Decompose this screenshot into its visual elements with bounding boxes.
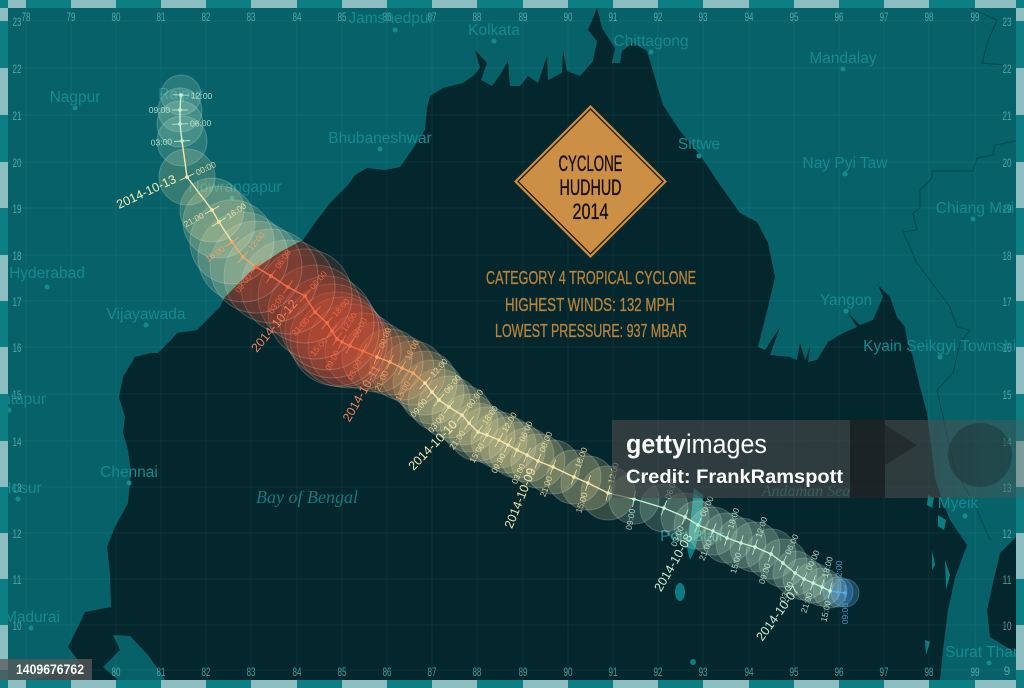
date labels along track: 2014-10-10 — [406, 417, 460, 473]
longitude and latitude labels: 97 — [880, 10, 889, 24]
city labels: Raipur — [158, 86, 204, 103]
longitude and latitude labels: 98 — [924, 665, 934, 679]
three-hourly ticks and time labels: 12:00 — [339, 310, 359, 334]
three-hourly ticks and time labels: 18:00 — [573, 446, 589, 469]
sea name: Andaman Sea: Andaman Sea — [761, 483, 850, 500]
city labels: Yangon — [820, 292, 872, 309]
three-hourly ticks and time labels: 03:00 — [266, 292, 287, 315]
longitude and latitude labels: 13 — [12, 481, 22, 495]
longitude and latitude labels: 79 — [66, 665, 76, 679]
cyclone statistics text — [486, 267, 696, 341]
city labels: Bhubaneshwar — [328, 130, 432, 147]
image id tag — [0, 659, 92, 680]
longitude and latitude labels: 17 — [12, 295, 22, 309]
three-hourly ticks and time labels: 21:00 — [538, 474, 554, 498]
three-hourly ticks and time labels: 21:00 — [799, 591, 815, 614]
watermark credit: Credit: FrankRamspott — [626, 467, 844, 488]
three-hourly ticks and time labels: 09:00 — [624, 508, 637, 531]
longitude and latitude labels: 93 — [698, 665, 708, 679]
longitude and latitude labels: 18 — [1002, 249, 1012, 263]
three-hourly ticks and time labels: 03:00 — [345, 358, 363, 381]
longitude and latitude labels: 13 — [1002, 481, 1012, 495]
image id tag: 1409676762 — [16, 662, 84, 677]
cyclone statistics text: LOWEST PRESSURE: 937 MBAR — [495, 320, 687, 341]
city labels: Port Blair — [660, 528, 724, 545]
three-hourly ticks and time labels: 09:00 — [840, 603, 850, 624]
longitude and latitude labels: 97 — [880, 665, 889, 679]
three-hourly ticks and time labels: 09:00 — [233, 272, 254, 295]
longitude and latitude labels: 85 — [338, 665, 347, 679]
three-hourly ticks and time labels: 03:00 — [509, 462, 527, 485]
longitude and latitude labels: 94 — [744, 10, 754, 24]
longitude and latitude labels: 83 — [246, 10, 256, 24]
date labels along track: 2014-10-08 — [651, 531, 696, 594]
longitude and latitude labels: 82 — [202, 665, 211, 679]
longitude and latitude labels: 88 — [472, 665, 482, 679]
longitude and latitude labels: 96 — [834, 665, 844, 679]
longitude and latitude labels: 85 — [338, 10, 347, 24]
title text: 2014 — [572, 199, 608, 224]
longitude and latitude labels: 23 — [1002, 15, 1012, 29]
three-hourly ticks and time labels: 03:00 — [426, 412, 447, 435]
three-hourly ticks and time labels: 18:00 — [820, 555, 835, 579]
longitude and latitude labels: 79 — [66, 10, 76, 24]
three-hourly ticks and time labels: 06:00 — [517, 419, 535, 443]
three-hourly ticks and time labels: 09:00 — [149, 105, 170, 115]
storm wind-radius circles along track — [157, 75, 859, 608]
three-hourly ticks and time labels: 00:00 — [308, 269, 329, 292]
three-hourly ticks and time labels: 09:00 — [757, 562, 773, 585]
longitude and latitude labels: 91 — [608, 10, 618, 24]
longitude and latitude labels: 19 — [1002, 202, 1012, 216]
sea name: Bay of Bengal: Bay of Bengal — [256, 487, 358, 507]
sea: Gulf of Thailand — [987, 537, 1016, 653]
longitude and latitude labels: 10 — [12, 619, 22, 633]
three-hourly ticks and time labels: 15:00 — [204, 243, 227, 264]
date labels along track: 2014-10-12 — [248, 297, 300, 355]
city labels: Vijayawada — [106, 306, 186, 323]
three-hourly ticks and time labels: 00:00 — [376, 326, 393, 350]
longitude and latitude labels: 89 — [518, 10, 528, 24]
city labels: Hyderabad — [9, 265, 85, 282]
three-hourly ticks and time labels: 12:00 — [246, 230, 267, 253]
watermark logo: gettyimages — [626, 429, 767, 459]
longitude and latitude labels: 86 — [382, 665, 392, 679]
three-hourly ticks and time labels: 06:00 — [783, 532, 801, 556]
date labels along track: 2014-10-13 — [114, 172, 178, 212]
three-hourly ticks and time labels: 18:00 — [402, 338, 421, 362]
three-hourly ticks and time labels: 00:00 — [194, 159, 218, 177]
longitude and latitude labels: 84 — [292, 665, 302, 679]
city labels: Kyain Seikgyi Township — [863, 338, 1024, 355]
three-hourly ticks and time labels: 15:00 — [819, 599, 833, 623]
longitude and latitude labels: 82 — [202, 10, 211, 24]
longitude and latitude labels: 10 — [1002, 619, 1012, 633]
longitude and latitude labels: 88 — [472, 10, 482, 24]
city labels: Hosur — [0, 480, 42, 497]
longitude and latitude labels: 21 — [12, 109, 22, 123]
three-hourly ticks and time labels: 00:00 — [464, 387, 485, 410]
three-hourly ticks and time labels: 12:00 — [753, 515, 770, 539]
longitude and latitude labels: 14 — [12, 435, 22, 449]
longitude and latitude labels: 81 — [156, 10, 166, 24]
three-hourly ticks and time labels: 15:00 — [574, 491, 590, 514]
longitude and latitude labels: 78 — [22, 10, 31, 24]
longitude and latitude labels: 91 — [608, 665, 618, 679]
city labels: Nowrangapur — [188, 179, 282, 196]
longitude and latitude labels: 16 — [1002, 341, 1012, 355]
longitude and latitude labels: 92 — [654, 10, 663, 24]
three-hourly ticks and time labels: 09:00 — [323, 348, 342, 372]
date labels along track: 2014-10-09 — [502, 466, 539, 530]
three-hourly ticks and time labels: 12:00 — [833, 560, 844, 582]
longitude and latitude labels: 83 — [246, 665, 256, 679]
longitude and latitude labels: 12 — [1002, 527, 1012, 541]
cyclone statistics text: HIGHEST WINDS: 132 MPH — [505, 294, 675, 315]
longitude and latitude labels: 80 — [112, 10, 121, 24]
city labels: Myeik — [938, 495, 978, 512]
city labels: Chiang Mai — [936, 200, 1014, 217]
longitude and latitude labels: 92 — [654, 665, 663, 679]
three-hourly ticks and time labels: 06:00 — [442, 373, 463, 396]
longitude and latitude labels: 94 — [744, 665, 754, 679]
three-hourly ticks and time labels: 18:00 — [725, 506, 742, 530]
longitude and latitude labels: 86 — [382, 10, 392, 24]
three-hourly ticks and time labels: 12:00 — [191, 90, 213, 101]
city labels: Chittagong — [614, 33, 688, 50]
three-hourly ticks and time labels: 09:00 — [489, 451, 508, 475]
longitude and latitude labels: 95 — [790, 10, 799, 24]
land border lines — [903, 8, 1016, 540]
longitude and latitude labels: 17 — [1002, 295, 1012, 309]
three-hourly ticks and time labels: 09:00 — [408, 396, 430, 419]
longitude and latitude labels: 19 — [12, 202, 22, 216]
longitude and latitude labels: 87 — [428, 10, 437, 24]
three-hourly ticks and time labels: 03:00 — [150, 137, 173, 148]
three-hourly ticks and time labels: 21:00 — [697, 538, 714, 562]
longitude and latitude labels: 84 — [292, 10, 302, 24]
longitude and latitude labels: 90 — [564, 665, 573, 679]
three-hourly ticks and time labels: 03:00 — [669, 524, 686, 548]
longitude and latitude labels: 11 — [1002, 573, 1012, 587]
road sign: cyclone title — [514, 105, 667, 258]
date labels along track: 2014-10-11 — [340, 362, 384, 424]
three-hourly ticks and time labels: 06:00 — [663, 477, 679, 500]
land: Andaman and Nicobar islands — [675, 488, 950, 665]
three-hourly ticks and time labels: 21:00 — [372, 369, 390, 392]
date labels along track — [114, 172, 802, 644]
longitude and latitude labels: 12 — [12, 527, 22, 541]
three-hourly ticks and time labels: 00:00 — [698, 494, 716, 518]
three-hourly ticks and time labels: 12:00 — [428, 356, 450, 379]
three-hourly ticks and time labels: 18:00 — [480, 403, 500, 427]
storm track line — [180, 95, 845, 593]
three-hourly ticks and time labels — [149, 90, 850, 624]
three-hourly ticks and time labels: 03:00 — [777, 580, 795, 603]
longitude and latitude labels: 9 — [1004, 664, 1011, 678]
three-hourly ticks and time labels: 15:00 — [728, 551, 743, 575]
city labels: Jamshedpur — [348, 10, 434, 27]
three-hourly ticks and time labels: 21:00 — [182, 210, 206, 229]
city labels: Surat Thani — [945, 644, 1024, 661]
longitude and latitude labels: 89 — [518, 665, 528, 679]
longitude and latitude labels: 18 — [12, 249, 22, 263]
longitude and latitude labels: 87 — [428, 665, 437, 679]
longitude and latitude labels: 15 — [1002, 388, 1012, 402]
city labels: Sittwe — [678, 136, 720, 153]
longitude and latitude labels: 81 — [156, 665, 166, 679]
longitude and latitude labels: 22 — [1002, 62, 1012, 76]
longitude and latitude labels: 16 — [12, 341, 22, 355]
longitude and latitude labels: 80 — [112, 665, 121, 679]
longitude and latitude labels: 96 — [834, 10, 844, 24]
longitude and latitude labels: 95 — [790, 665, 799, 679]
city labels: Mandalay — [809, 50, 877, 67]
city labels: Madurai — [4, 609, 60, 626]
date labels along track: 2014-10-07 — [754, 584, 802, 644]
longitude and latitude labels: 20 — [12, 156, 22, 170]
watermark panel — [612, 420, 1024, 498]
longitude and latitude labels: 90 — [564, 10, 573, 24]
three-hourly ticks and time labels: 18:00 — [225, 201, 248, 221]
cyclone statistics text: CATEGORY 4 TROPICAL CYCLONE — [486, 267, 696, 288]
city labels: Chennai — [100, 464, 158, 481]
land: Sri Lanka — [103, 635, 165, 680]
title text: CYCLONE — [558, 151, 622, 176]
three-hourly ticks and time labels: 15:00 — [393, 379, 412, 403]
longitude and latitude labels: 22 — [12, 62, 22, 76]
three-hourly ticks and time labels: 12:00 — [606, 461, 621, 485]
city labels: Nay Pyi Taw — [802, 155, 888, 172]
longitude and latitude labels: 93 — [698, 10, 708, 24]
three-hourly ticks and time labels: 06:00 — [190, 118, 212, 129]
three-hourly ticks and time labels: 21:00 — [289, 315, 312, 338]
three-hourly ticks and time labels: 15:00 — [308, 335, 330, 358]
city labels: Nagpur — [50, 89, 100, 106]
title text — [558, 151, 622, 224]
three-hourly ticks and time labels: 18:00 — [330, 296, 352, 319]
three-hourly ticks and time labels: 00:00 — [537, 430, 554, 454]
title text: HUDHUD — [560, 175, 622, 200]
three-hourly ticks and time labels: 21:00 — [447, 428, 468, 451]
longitude and latitude labels: 98 — [924, 10, 934, 24]
city labels: Kolkata — [468, 22, 520, 39]
three-hourly ticks and time labels: 06:00 — [273, 247, 293, 271]
three-hourly ticks and time labels: 06:00 — [350, 316, 369, 340]
longitude and latitude labels: 21 — [1002, 109, 1012, 123]
longitude and latitude labels: 11 — [12, 573, 22, 587]
longitude and latitude labels: 99 — [970, 665, 980, 679]
three-hourly ticks and time labels: 12:00 — [500, 410, 519, 434]
longitude and latitude labels: 99 — [970, 10, 980, 24]
three-hourly ticks and time labels: 00:00 — [804, 548, 822, 572]
three-hourly ticks and time labels: 15:00 — [467, 441, 486, 465]
longitude and latitude labels: 15 — [12, 388, 22, 402]
longitude and latitude labels: 23 — [12, 15, 22, 29]
longitude and latitude labels: 20 — [1002, 156, 1012, 170]
longitude and latitude labels: 14 — [1002, 435, 1012, 449]
